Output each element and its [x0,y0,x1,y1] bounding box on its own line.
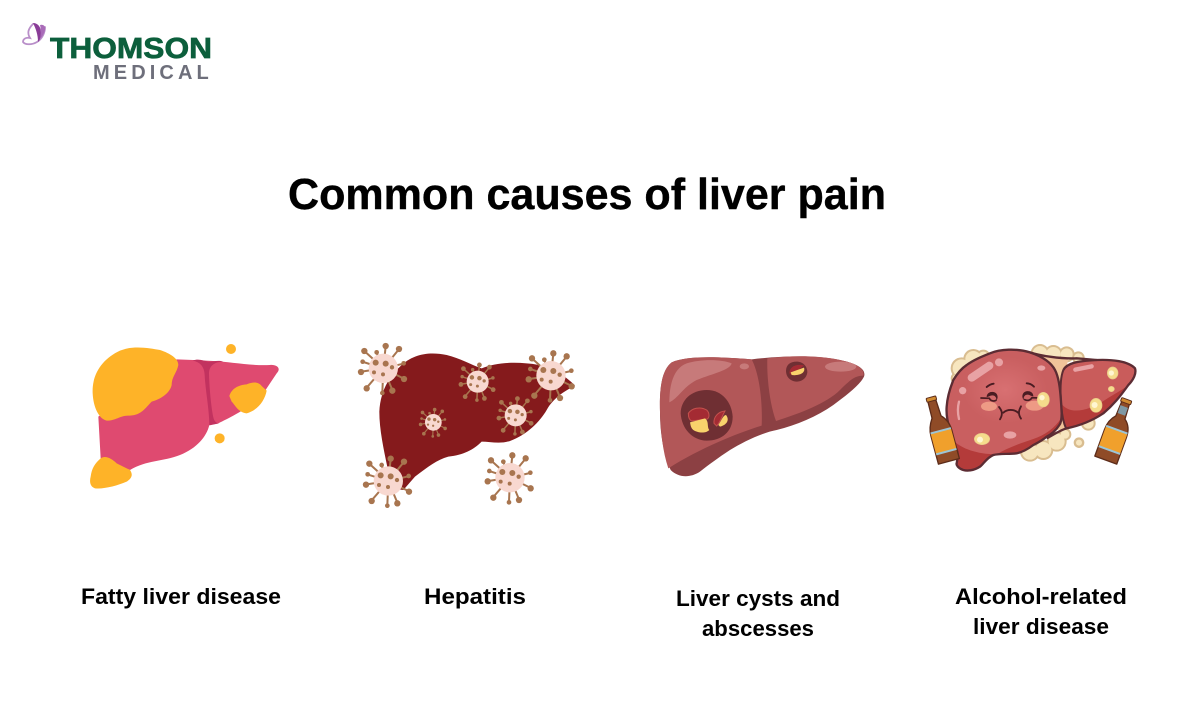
cyst yellow small [718,415,728,427]
icon: fatty liver [90,344,279,489]
bottle right [1095,396,1139,464]
virus [419,408,447,438]
cyst red [688,408,709,421]
liver body [379,354,575,490]
icon: butterfly heart [23,23,45,44]
panel: hepatitis [358,343,575,609]
cyst small yellow [791,368,804,375]
cyst small top [789,365,804,375]
liver shadow [660,356,864,476]
panel: liver cysts and abscesses [660,356,864,641]
brows and mouth [987,383,1034,419]
upper outline extension [1030,352,1097,360]
liver right lobe fill [1061,360,1135,428]
icon: liver with abscesses [660,356,864,476]
liver right lobe [767,356,864,421]
title: Common causes of liver pain [288,170,886,219]
icon: liver with viruses [358,343,575,508]
highlight dots [959,358,1045,439]
logo subtitle: MEDICAL [93,62,213,84]
label: Fatty liver disease [81,584,281,609]
liver left lobe [946,350,1062,471]
highlight small [740,363,749,369]
bottle left [921,394,959,464]
virus [525,350,575,403]
panel: fatty liver disease [81,344,281,609]
liver glow [963,357,1047,423]
virus [484,452,534,505]
right lobe shadow [1061,385,1128,428]
fat spot highlights [977,370,1114,443]
liver ligament [193,360,223,425]
liver lower shadow [955,418,1061,471]
fat deposit large [93,347,178,421]
band between lobes [1040,356,1068,430]
label: Liver cysts and [676,586,840,611]
label line 2: abscesses [702,616,814,641]
left lobe outline [946,350,1062,471]
abscess large [681,390,733,441]
fat cloud outline [951,344,1096,462]
abscess small [786,362,807,382]
right lobe outline [1047,360,1135,438]
fat cloud fill [953,346,1094,460]
eye right [1022,391,1041,400]
highlights [958,366,1092,419]
eye left [981,392,998,401]
liver left lobe [660,357,762,468]
fat deposit bottom [90,457,132,489]
virus [497,396,534,436]
highlight right [825,362,856,372]
cheek right [1026,401,1044,411]
label line 2: liver disease [973,614,1109,639]
virus [363,455,412,508]
fat droplet bottom [215,433,225,443]
virus [459,363,496,402]
fat droplet top [226,344,236,354]
logo: Thomson Medical [23,23,213,84]
fat deposit right [229,383,267,413]
label: Hepatitis [424,584,526,609]
highlight [669,360,732,402]
virus [358,343,407,395]
right lobe inner line [1060,370,1066,428]
cyst yellow [690,418,709,433]
logo wordmark: THOMSON [50,33,212,65]
liver body [98,359,279,470]
label: Alcohol-related [955,584,1127,609]
fat spots [974,367,1118,445]
panel: alcohol-related liver disease [921,344,1139,639]
icon: sad liver with bottles [921,344,1139,471]
cyst red small [714,411,725,426]
cheek left [981,402,997,411]
